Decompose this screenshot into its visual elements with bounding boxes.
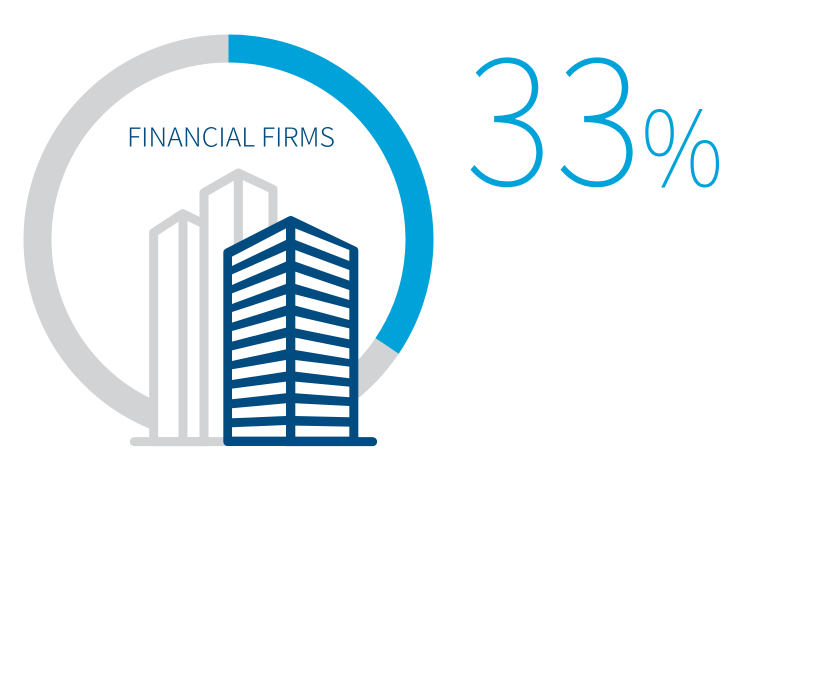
icon: grey ground line <box>134 428 287 455</box>
icon: grey background towers <box>154 173 273 442</box>
donut chart: 33 percent <box>38 48 420 430</box>
icon: office buildings <box>134 173 373 442</box>
heading: financial firms: FINANCIAL FIRMS <box>127 118 335 154</box>
icon: navy foreground tower <box>228 220 373 442</box>
statistic: 33 percent: % <box>641 66 723 216</box>
statistic: 33 percent <box>465 0 723 237</box>
